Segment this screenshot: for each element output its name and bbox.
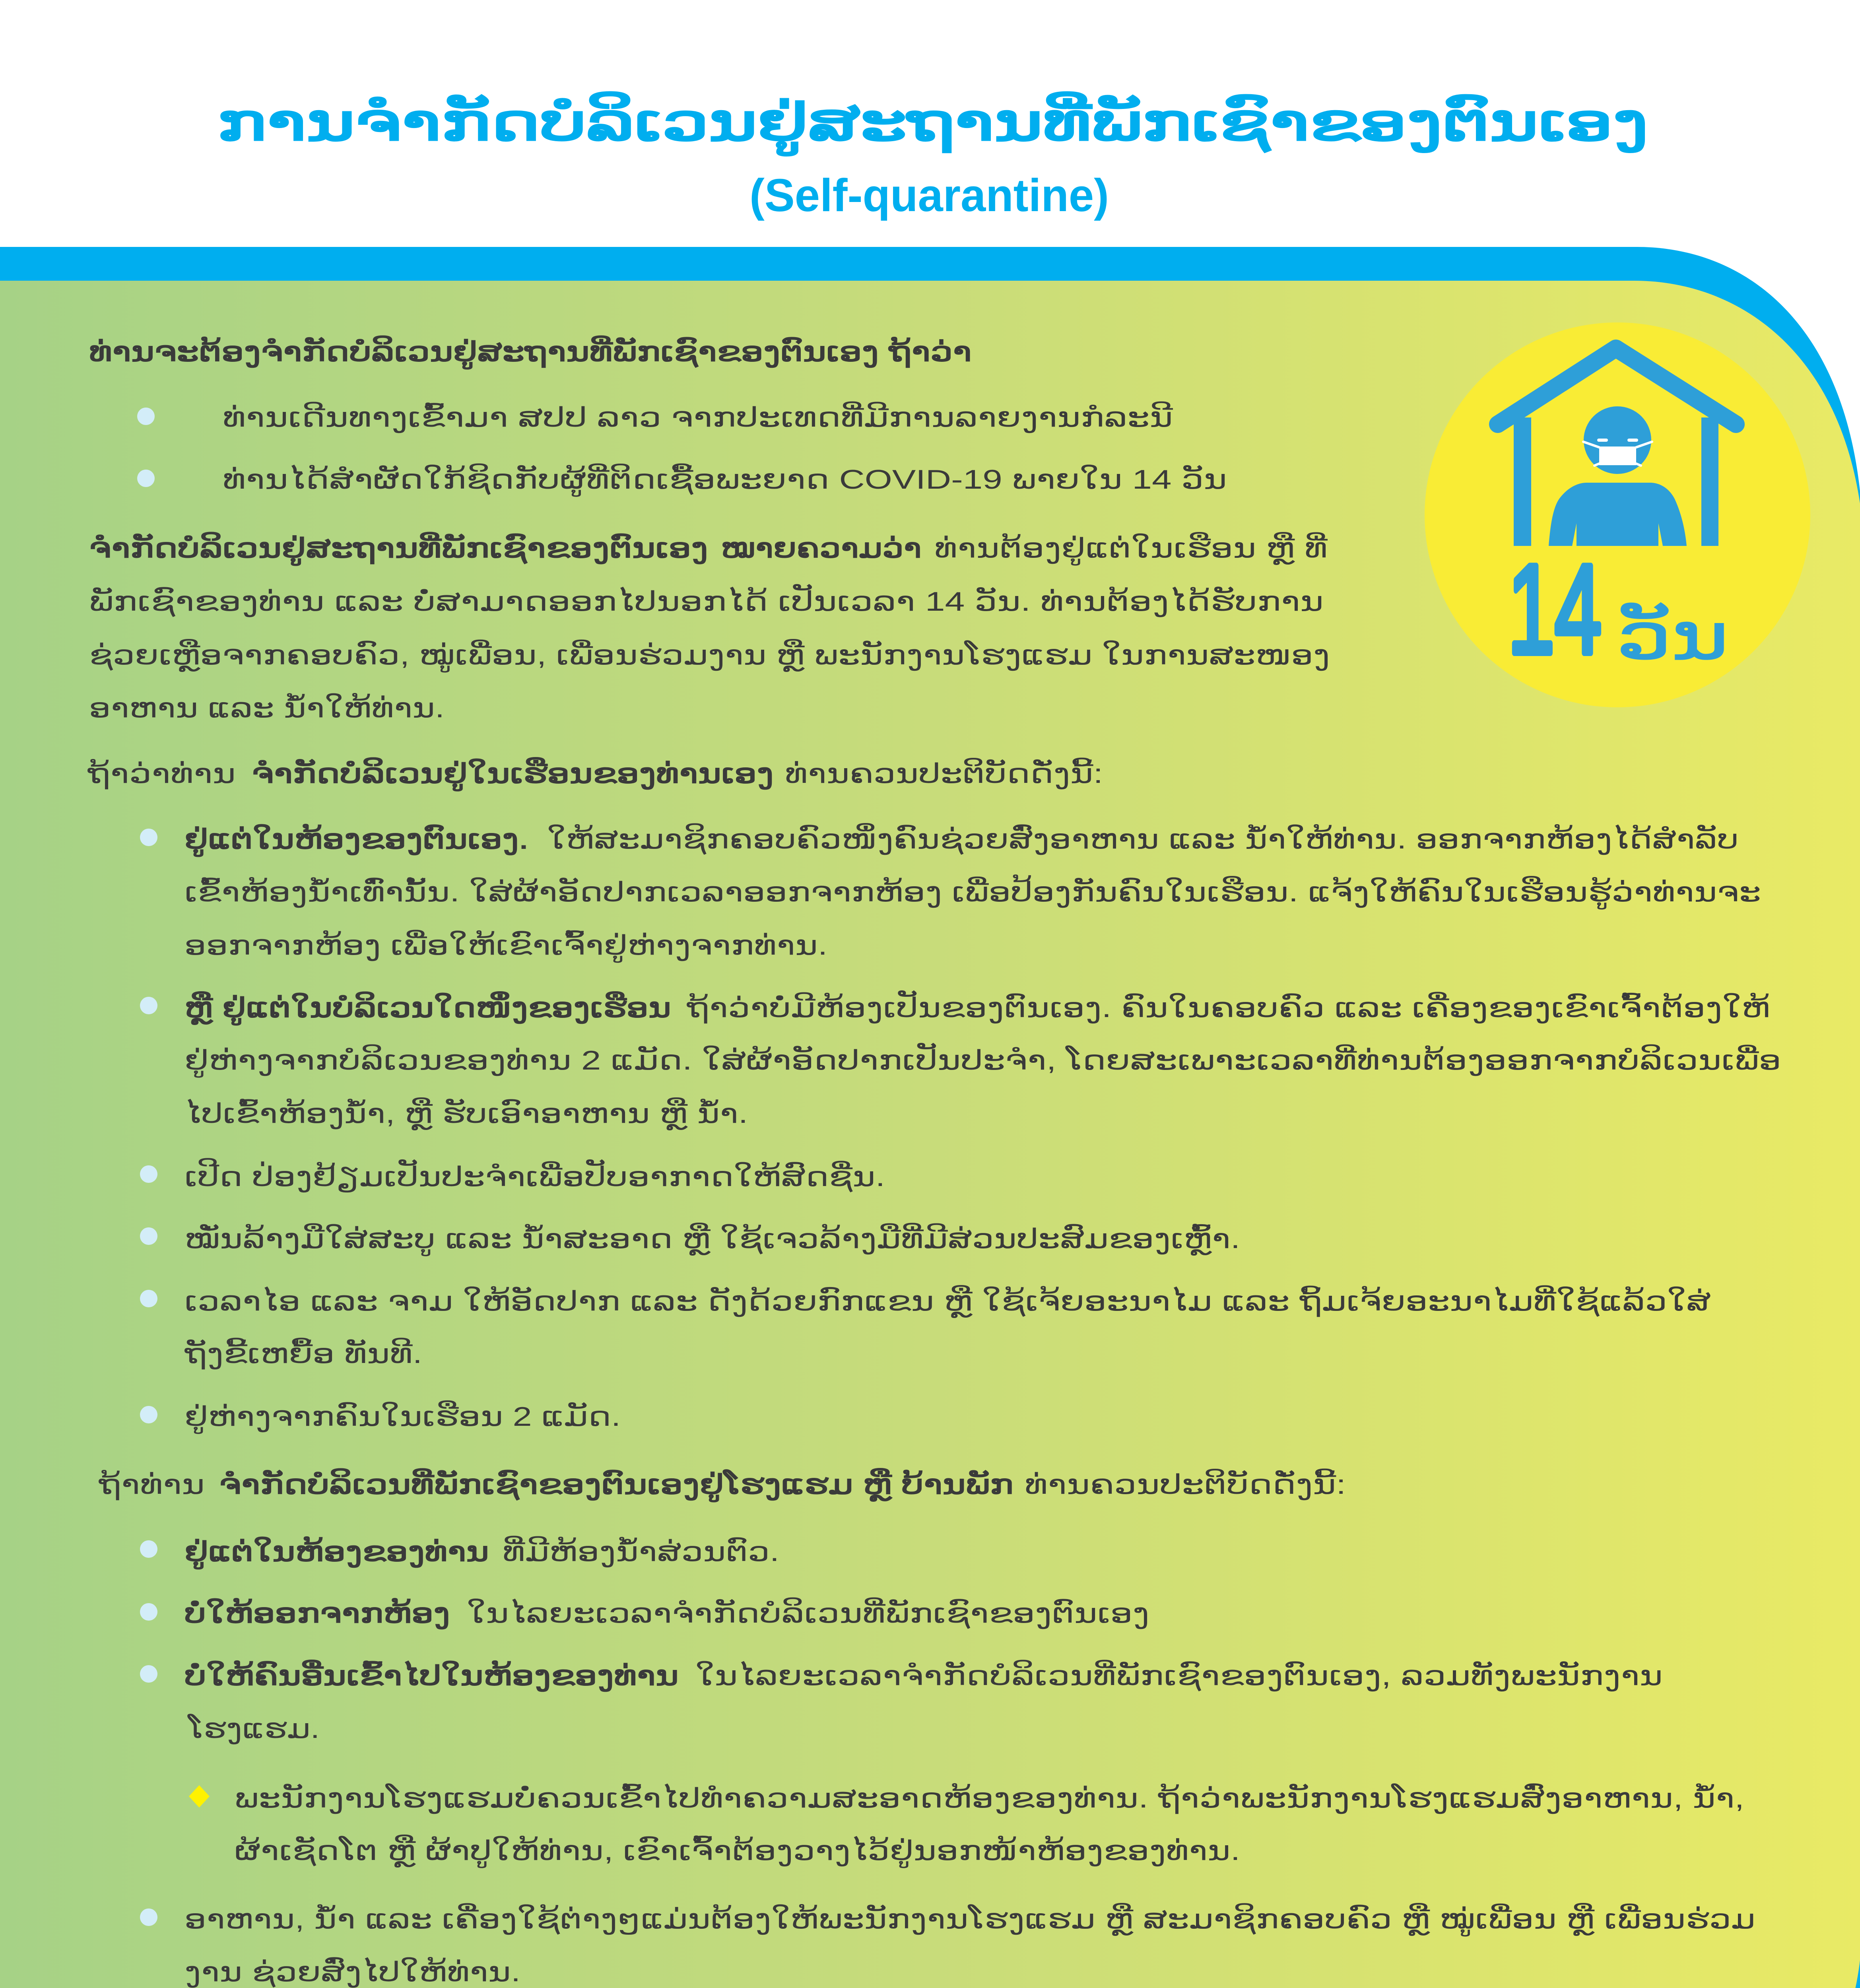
bullet: wash hands <box>140 1222 1240 1256</box>
intro line: ຈຳກັດບໍລິເວນຢູ່ໃນເຮືອນຂອງທ່ານເອງ <box>252 757 774 791</box>
icon: person with mask in house, 14 days <box>1425 322 1810 707</box>
bullet one <box>137 408 155 425</box>
house roof <box>1498 348 1736 424</box>
text block: meaning of self-quarantine: ຈຳກັດບໍລິເວນຢູ່ສະຖານທີ່ພັກເຊົາຂອງຕົນເອງ <box>89 532 708 566</box>
bullet: stay in own room: ໃຫ້ສະມາຊິກຄອບຄົວໜຶ່ງຄົນຊ່ວຍສົ່ງອາຫານ ແລະ ນໍ້າໃຫ້ທ່ານ. ອອກຈາກຫ້ອງໄດ້ສຳລັບ <box>547 823 1739 855</box>
intro line: ຈຳກັດບໍລິເວນທີ່ພັກເຊົາຂອງຕົນເອງຢູ່ໂຮງແຮມ ຫຼື ບ້ານພັກ <box>219 1468 1013 1502</box>
bullet: keep 2 metres <box>140 1400 621 1434</box>
bullet: cough etiquette <box>140 1285 1711 1369</box>
intro line: ທ່ານຄວນປະຕິບັດດັ່ງນີ້: <box>1025 1468 1346 1500</box>
bullet: stay in own room: ເຂົ້າຫ້ອງນໍ້າເທົ່ານັ້ນ. ໃສ່ຜ້າອັດປາກເວລາອອກຈາກຫ້ອງ ເພື່ອປ້ອງກັນຄົນໃນເຮືອນ. ແຈ້ງໃຫ້ຄົນໃນເຮືອນຮູ້ວ່າທ່ານຈະ <box>184 874 1761 910</box>
bullet: stay in own room: ອອກຈາກຫ້ອງ ເພື່ອໃຫ້ເຂົາເຈົ້າຢູ່ຫ່າງຈາກທ່ານ. <box>184 929 827 963</box>
bullet: stay in one area: ໄປເຂົ້າຫ້ອງນໍ້າ, ຫຼື ຮັບເອົາອາຫານ ຫຼື ນໍ້າ. <box>184 1097 748 1130</box>
title: ການຈຳກັດບໍລິເວນຢູ່ສະຖານທີ່ພັກເຊົາຂອງຕົນເອງ <box>217 92 1648 155</box>
head <box>1584 406 1651 474</box>
text block: quarantine in hotel <box>98 1468 1782 1988</box>
intro line: ທ່ານຄວນປະຕິບັດດັ່ງນີ້: <box>785 757 1103 789</box>
bullet: do not leave: ບໍ່ໃຫ້ອອກຈາກຫ້ອງ <box>184 1598 450 1629</box>
intro line: ຖ້າທ່ານ <box>98 1470 205 1500</box>
yellow backing band <box>0 457 1860 1988</box>
text block: meaning of self-quarantine: ໝາຍຄວາມວ່າ <box>721 533 922 563</box>
sub-bullet: hotel staff: ຜ້າເຊັດໂຕ ຫຼື ຜ້າປູໃຫ້ທ່ານ, ເຂົາເຈົ້າຕ້ອງວາງໄວ້ຢູ່ນອກໜ້າຫ້ອງຂອງທ່ານ. <box>235 1834 1240 1868</box>
bullet: food and supplies <box>140 1903 1755 1988</box>
bullet two text: ທ່ານໄດ້ສຳຜັດໃກ້ຊິດກັບຜູ້ທີ່ຕິດເຊື້ອພະຍາດ COVID-19 ພາຍໃນ 14 ວັນ <box>223 463 1227 497</box>
bullet: cough etiquette: ເວລາໄອ ແລະ ຈາມ ໃຫ້ອັດປາກ ແລະ ດັງດ້ວຍກົກແຂນ ຫຼື ໃຊ້ເຈ້ຍອະນາໄມ ແລະ ຖິ້ມເຈ້ຍອະນາໄມທີ່ໃຊ້ແລ້ວໃສ່ <box>184 1285 1711 1318</box>
bullet: stay in one area: ຫຼື ຢູ່ແຕ່ໃນບໍລິເວນໃດໜຶ່ງຂອງເຮືອນ <box>184 991 671 1025</box>
text block: who must self-quarantine <box>89 335 1227 497</box>
bullet: stay in one area: ຢູ່ຫ່າງຈາກບໍລິເວນຂອງທ່ານ 2 ແມັດ. ໃສ່ຜ້າອັດປາກເປັນປະຈຳ, ໂດຍສະເພາະເວລາທີ່ທ່ານຕ້ອງອອກຈາກບໍລິເວນເພື່ອ <box>184 1043 1781 1078</box>
bullet: no visitors: ບໍ່ໃຫ້ຄົນອື່ນເຂົ້າໄປໃນຫ້ອງຂອງທ່ານ <box>184 1659 679 1691</box>
bullet: wash hands: ໝັ່ນລ້າງມືໃສ່ສະບູ ແລະ ນໍ້າສະອາດ ຫຼື ໃຊ້ເຈວລ້າງມືທີ່ມີສ່ວນປະສົມຂອງເຫຼົ້າ. <box>184 1222 1240 1256</box>
sub-bullet: hotel staff: ພະນັກງານໂຮງແຮມບໍ່ຄວນເຂົ້າໄປທຳຄວາມສະອາດຫ້ອງຂອງທ່ານ. ຖ້າວ່າພະນັກງານໂຮງແຮມສົ່ງອາຫານ, ນໍ້າ, <box>235 1783 1744 1814</box>
face mask <box>1583 439 1652 466</box>
heading line: ທ່ານຈະຕ້ອງຈຳກັດບໍລິເວນຢູ່ສະຖານທີ່ພັກເຊົາຂອງຕົນເອງ ຖ້າວ່າ <box>89 335 972 369</box>
sub-bullet: hotel staff <box>189 1783 1744 1868</box>
bullet: food and supplies: ງານ ຊ່ວຍສົ່ງໄປໃຫ້ທ່ານ. <box>184 1957 520 1988</box>
bullet two <box>137 470 155 487</box>
bullet: stay in own room <box>140 823 1761 963</box>
bullet one text: ທ່ານເດີນທາງເຂົ້າມາ ສປປ ລາວ ຈາກປະເທດທີ່ມີການລາຍງານກໍລະນີ <box>223 401 1173 433</box>
intro line: ຖ້າວ່າທ່ານ <box>87 759 236 789</box>
subtitle: (Self-quarantine) <box>749 169 1109 221</box>
bullet: stay in room <box>140 1535 779 1569</box>
intro line <box>98 1468 1346 1502</box>
bullet: do not leave: ໃນໄລຍະເວລາຈຳກັດບໍລິເວນທີ່ພັກເຊົາຂອງຕົນເອງ <box>467 1597 1149 1629</box>
body <box>1549 483 1687 546</box>
yellow circle <box>1425 322 1810 707</box>
bullet: stay in room: ທີ່ມີຫ້ອງນໍ້າສ່ວນຕົວ. <box>503 1535 779 1567</box>
text block: meaning of self-quarantine: ທ່ານຕ້ອງຢູ່ແຕ່ໃນເຮືອນ ຫຼື ທີ່ <box>934 531 1328 566</box>
text block: meaning of self-quarantine: ອາຫານ ແລະ ນໍ້າໃຫ້ທ່ານ. <box>89 693 445 723</box>
bullet: do not leave <box>140 1597 1149 1629</box>
text block: meaning of self-quarantine: ຊ່ວຍເຫຼືອຈາກຄອບຄົວ, ໝູ່ເພື່ອນ, ເພື່ອນຮ່ວມງານ ຫຼື ພະນັກງານໂຮງແຮມ ໃນການສະໜອງ <box>89 639 1330 673</box>
text block: meaning of self-quarantine <box>89 531 1330 723</box>
14 label: 14 <box>1508 539 1602 680</box>
bullet: stay in one area <box>140 990 1781 1130</box>
bullet: food and supplies: ອາຫານ, ນໍ້າ ແລະ ເຄື່ອງໃຊ້ຕ່າງໆແມ່ນຕ້ອງໃຫ້ພະນັກງານໂຮງແຮມ ຫຼື ສະມາຊິກຄອບຄົວ ຫຼື ໝູ່ເພື່ອນ ຫຼື ເພື່ອນຮ່ວມ <box>184 1903 1755 1937</box>
bullet: cough etiquette: ຖັງຂີ້ເຫຍື້ອ ທັນທີ. <box>184 1337 422 1369</box>
bullet: no visitors: ໂຮງແຮມ. <box>187 1714 320 1744</box>
bullet: no visitors <box>140 1659 1663 1744</box>
intro line <box>87 757 1103 791</box>
house walls <box>1514 417 1718 546</box>
bullet: keep 2 metres: ຢູ່ຫ່າງຈາກຄົນໃນເຮືອນ 2 ແມັດ. <box>184 1400 621 1434</box>
bullet: open windows <box>140 1157 885 1192</box>
bullet: stay in room: ຢູ່ແຕ່ໃນຫ້ອງຂອງທ່ານ <box>184 1537 489 1569</box>
bullet: stay in own room: ຢູ່ແຕ່ໃນຫ້ອງຂອງຕົນເອງ. <box>184 824 528 857</box>
text block: quarantine at home <box>87 757 1781 1434</box>
days label: ວັນ <box>1617 601 1729 672</box>
text block: meaning of self-quarantine: ພັກເຊົາຂອງທ່ານ ແລະ ບໍ່ສາມາດອອກໄປນອກໄດ້ ເປັນເວລາ 14 ວັນ. ທ່ານຕ້ອງໄດ້ຮັບການ <box>89 584 1324 617</box>
bullet: open windows: ເປີດ ປ່ອງຢ້ຽມເປັນປະຈຳເພື່ອປັບອາກາດໃຫ້ສົດຊື່ນ. <box>184 1157 885 1192</box>
bullet: stay in one area: ຖ້າວ່າບໍ່ມີຫ້ອງເປັນຂອງຕົນເອງ. ຄົນໃນຄອບຄົວ ແລະ ເຄື່ອງຂອງເຂົາເຈົ້າຕ້ອງໃຫ້ <box>686 990 1770 1023</box>
bullet: no visitors: ໃນໄລຍະເວລາຈຳກັດບໍລິເວນທີ່ພັກເຊົາຂອງຕົນເອງ, ລວມທັງພະນັກງານ <box>695 1659 1663 1691</box>
